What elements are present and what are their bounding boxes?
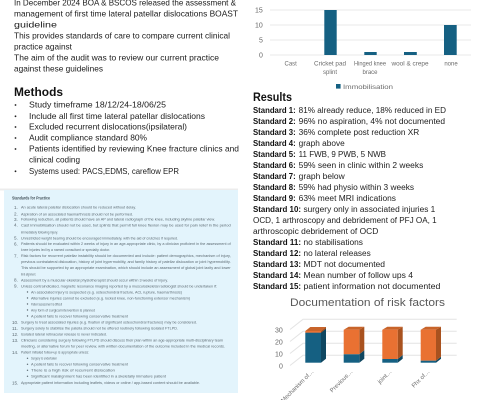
y axis labels: 20 xyxy=(275,339,283,346)
standards list: Patient assessment is difficult xyxy=(31,301,63,306)
results list: OCD, 1 arthroscopy and debridement of PFJ OA, 1 xyxy=(253,216,437,225)
x axis labels: Cricket pad xyxy=(314,62,346,68)
standards list: 10. xyxy=(12,320,18,325)
standards list: 12. xyxy=(12,332,18,337)
methods list: Excluded recurrent dislocations(ipsilateral) xyxy=(29,122,187,132)
y axis labels: 15 xyxy=(255,8,263,15)
standards list: An associated injury is suspected (e.g. osteochondral fracture, ACL rupture, haemarthrosis) xyxy=(31,289,183,294)
methods list: Patients identified by reviewing Knee fracture clinics and xyxy=(29,144,239,154)
standards list: previous contralateral dislocation, history of joint hypermobility, and family history of patellar dislocation or joint hypermobility. xyxy=(21,259,231,264)
standards list: Clinicians considering surgery following FTLPD should discuss their plan within an age-appropriate multi-disciplinary team xyxy=(21,338,223,343)
results list: arthroscopic debridement of OCD xyxy=(253,227,379,236)
results list: Standard 11: xyxy=(253,238,301,247)
results list: Standard 6: xyxy=(253,161,296,170)
bar chart: immobilisation xyxy=(255,8,471,91)
results list: Standard 10: xyxy=(253,205,301,214)
results list: 81% already reduce, 18% reduced in ED xyxy=(299,106,446,115)
results list: 63% meet MRI indications xyxy=(299,194,396,203)
chart title: Documentation of risk factors xyxy=(290,297,445,309)
standards list: 11. xyxy=(12,326,18,331)
x axis labels: none xyxy=(444,62,458,68)
introduction text: management of first time lateral patellar dislocations BOAST xyxy=(14,10,238,18)
standards list: A patient fails to recover following conservative treatment xyxy=(31,362,129,367)
standards list xyxy=(12,205,232,385)
methods list: clinical coding xyxy=(29,156,80,164)
results list: Standard 1: xyxy=(253,106,296,115)
3d stacked chart: documentation of risk factors xyxy=(275,297,457,400)
standards list: Surgery to treat associated injuries (e.g. fixation of significant osteochondral fractures) may be considered. xyxy=(21,320,197,325)
results list: Standard 15: xyxy=(253,282,301,291)
standards list: 14. xyxy=(12,350,18,355)
introduction text: guideline xyxy=(14,20,58,30)
standards list: An acute lateral patellar dislocation should be reduced without delay. xyxy=(21,205,136,210)
standards list: There is a high risk of recurrent dislocation xyxy=(31,368,115,373)
standards list: immediately following injury. xyxy=(21,229,58,234)
x axis labels: Fhx of… xyxy=(411,369,431,389)
introduction text: This provides standards of care to compare current clinical xyxy=(14,32,230,40)
x axis labels: splint xyxy=(323,70,337,76)
standards list: Surgery solely to stabilise the patella should not be offered routinely following isolated FTLPD. xyxy=(21,326,178,331)
panel: standards for practice xyxy=(0,188,238,393)
standards list: Cast immobilisation should not be used, but splints that permit full knee flexion may be used for pain relief in the period xyxy=(21,222,231,227)
stacked bar: family history xyxy=(421,327,441,363)
y axis labels: 0 xyxy=(259,53,263,60)
x axis labels: wool & crepe xyxy=(390,62,429,68)
standards list: Patients should be evaluated within 2 weeks of injury in an age-appropriate clinic, by a clinician proficient in the assessment of xyxy=(21,241,232,246)
panel heading: Standards for Practice xyxy=(12,196,51,201)
methods list: Audit compliance standard 80% xyxy=(29,134,147,142)
standards list: This should be supported by an appropriate examination, which should include an assessment of global joint laxity and lower xyxy=(21,265,231,270)
y axis labels: 10 xyxy=(275,351,283,358)
standards list: Appropriate patient information including leaflets, videos or online / app-based content should be available. xyxy=(21,380,200,385)
results list: Standard 4: xyxy=(253,139,296,148)
results list: 59% seen in clinic within 2 weeks xyxy=(299,161,423,170)
results list: Standard 12: xyxy=(253,249,301,258)
standards list: Any form of surgical intervention is planned xyxy=(31,307,95,312)
standards list: Assessment by a muscular-skeletal physiotherapist should occur within 3 weeks of injury. xyxy=(21,277,168,282)
y axis labels: 30 xyxy=(275,328,283,335)
methods list: Systems used: PACS,EDMS, careflow EPR xyxy=(29,167,179,176)
results list xyxy=(253,106,446,291)
standards list: 5. xyxy=(14,236,18,241)
methods list: Include all first time lateral patellar dislocations xyxy=(29,112,205,121)
introduction text xyxy=(14,0,238,74)
standards list: Aspiration of an associated haemarthrosis should not be performed. xyxy=(21,211,133,216)
stacked bar: mechanism of injury xyxy=(305,327,326,363)
x axis labels: Cast xyxy=(285,62,297,68)
y axis labels xyxy=(255,8,263,60)
standards list: Following reduction, all patients should have an AP and lateral radiograph of the knee, including skyline patellar view. xyxy=(21,217,215,222)
results list: graph above xyxy=(299,139,345,148)
results list: Standard 14: xyxy=(253,271,301,280)
standards list: 2. xyxy=(14,212,18,217)
heading: results: Results xyxy=(253,90,292,104)
methods list xyxy=(15,100,239,176)
standards list: A patient fails to recover following conservative treatment xyxy=(31,313,129,318)
heading: methods: Methods xyxy=(14,85,63,99)
x axis labels xyxy=(285,62,458,76)
results list: MDT not documented xyxy=(304,260,385,269)
standards list: limb alignment. xyxy=(21,271,36,276)
results list: Mean number of follow ups 4 xyxy=(304,271,414,280)
x axis labels: joint… xyxy=(376,369,393,386)
standards list: 1. xyxy=(14,205,18,210)
standards list: 13. xyxy=(12,338,18,343)
results list: Standard 2: xyxy=(253,117,296,126)
standards list: 3. xyxy=(14,217,18,222)
standards list: 8. xyxy=(14,278,18,283)
results list: Standard 13: xyxy=(253,260,301,269)
standards list: Significant malalignment has been identified in a skeletally immature patient xyxy=(31,374,167,379)
standards list: Unless contraindicated, magnetic resonance imaging reported by a musculoskeletal radiologist should be undertaken if: xyxy=(21,283,217,288)
x axis labels: Hinged knee xyxy=(354,62,387,68)
standards list: Alternative injuries cannot be excluded (e.g. locked knee, non-functioning extensor mechanism) xyxy=(31,295,191,300)
standards list: 7. xyxy=(14,253,18,258)
y axis labels xyxy=(275,328,283,370)
standards list: Surgery is undertaken xyxy=(31,356,57,361)
standards list: Isolated lateral retinacular release is never indicated. xyxy=(21,332,107,337)
y axis labels: 10 xyxy=(255,23,263,30)
introduction text: The aim of the audit was to review our current practice xyxy=(14,54,220,62)
stacked bar: previous dislocation xyxy=(344,327,364,363)
results list: graph below xyxy=(299,172,345,181)
results list: no lateral releases xyxy=(304,249,371,258)
standards list: meeting, or alternative forum for peer review, with written documentation of the outcome included in the medical records. xyxy=(21,344,225,349)
results list: no stabilisations xyxy=(304,238,363,247)
y axis labels: 5 xyxy=(259,38,263,45)
introduction text: practice against xyxy=(14,42,73,52)
results list: surgery only in associated injuries 1 xyxy=(304,205,435,214)
standards list: 4. xyxy=(14,223,18,228)
standards list: Risk factors for recurrent patellar instability should be documented and include: patient demographics, mechanism of injury, xyxy=(21,253,231,258)
x axis labels: Previous… xyxy=(329,369,354,394)
legend: Immobilisation xyxy=(343,84,393,91)
standards list: 6. xyxy=(14,241,18,246)
bars xyxy=(324,10,457,55)
x axis labels xyxy=(281,369,431,400)
results list: Standard 8: xyxy=(253,183,296,192)
standards list: 9. xyxy=(14,284,18,289)
standards list: 15. xyxy=(12,380,18,385)
standards list: Patient initiated follow-up is appropriate unless: xyxy=(21,350,89,355)
x axis labels: brace xyxy=(362,70,378,76)
results list: Standard 5: xyxy=(253,150,296,159)
methods list: Study timeframe 18/12/24-18/06/25 xyxy=(29,100,167,110)
results list: 36% complete post reduction XR xyxy=(299,128,420,137)
results list: 11 FWB, 9 PWB, 5 NWB xyxy=(299,150,386,159)
results list: 59% had physio within 3 weeks xyxy=(299,183,414,192)
standards list: knee injuries led by a named consultant or specialty doctor. xyxy=(21,247,110,252)
results list: Standard 7: xyxy=(253,172,296,181)
results list: patient information not documented xyxy=(304,282,440,291)
standards list: Unrestricted weight bearing should be encouraged immediately, with the aid of crutches if required. xyxy=(21,235,178,240)
stacked bar: joint hypermobility xyxy=(382,327,403,363)
results list: 96% no aspiration, 4% not documented xyxy=(299,117,445,126)
y axis labels: 0 xyxy=(279,363,283,370)
introduction text: against these guidelines xyxy=(14,64,103,74)
results list: Standard 3: xyxy=(253,128,296,137)
results list: Standard 9: xyxy=(253,194,296,203)
